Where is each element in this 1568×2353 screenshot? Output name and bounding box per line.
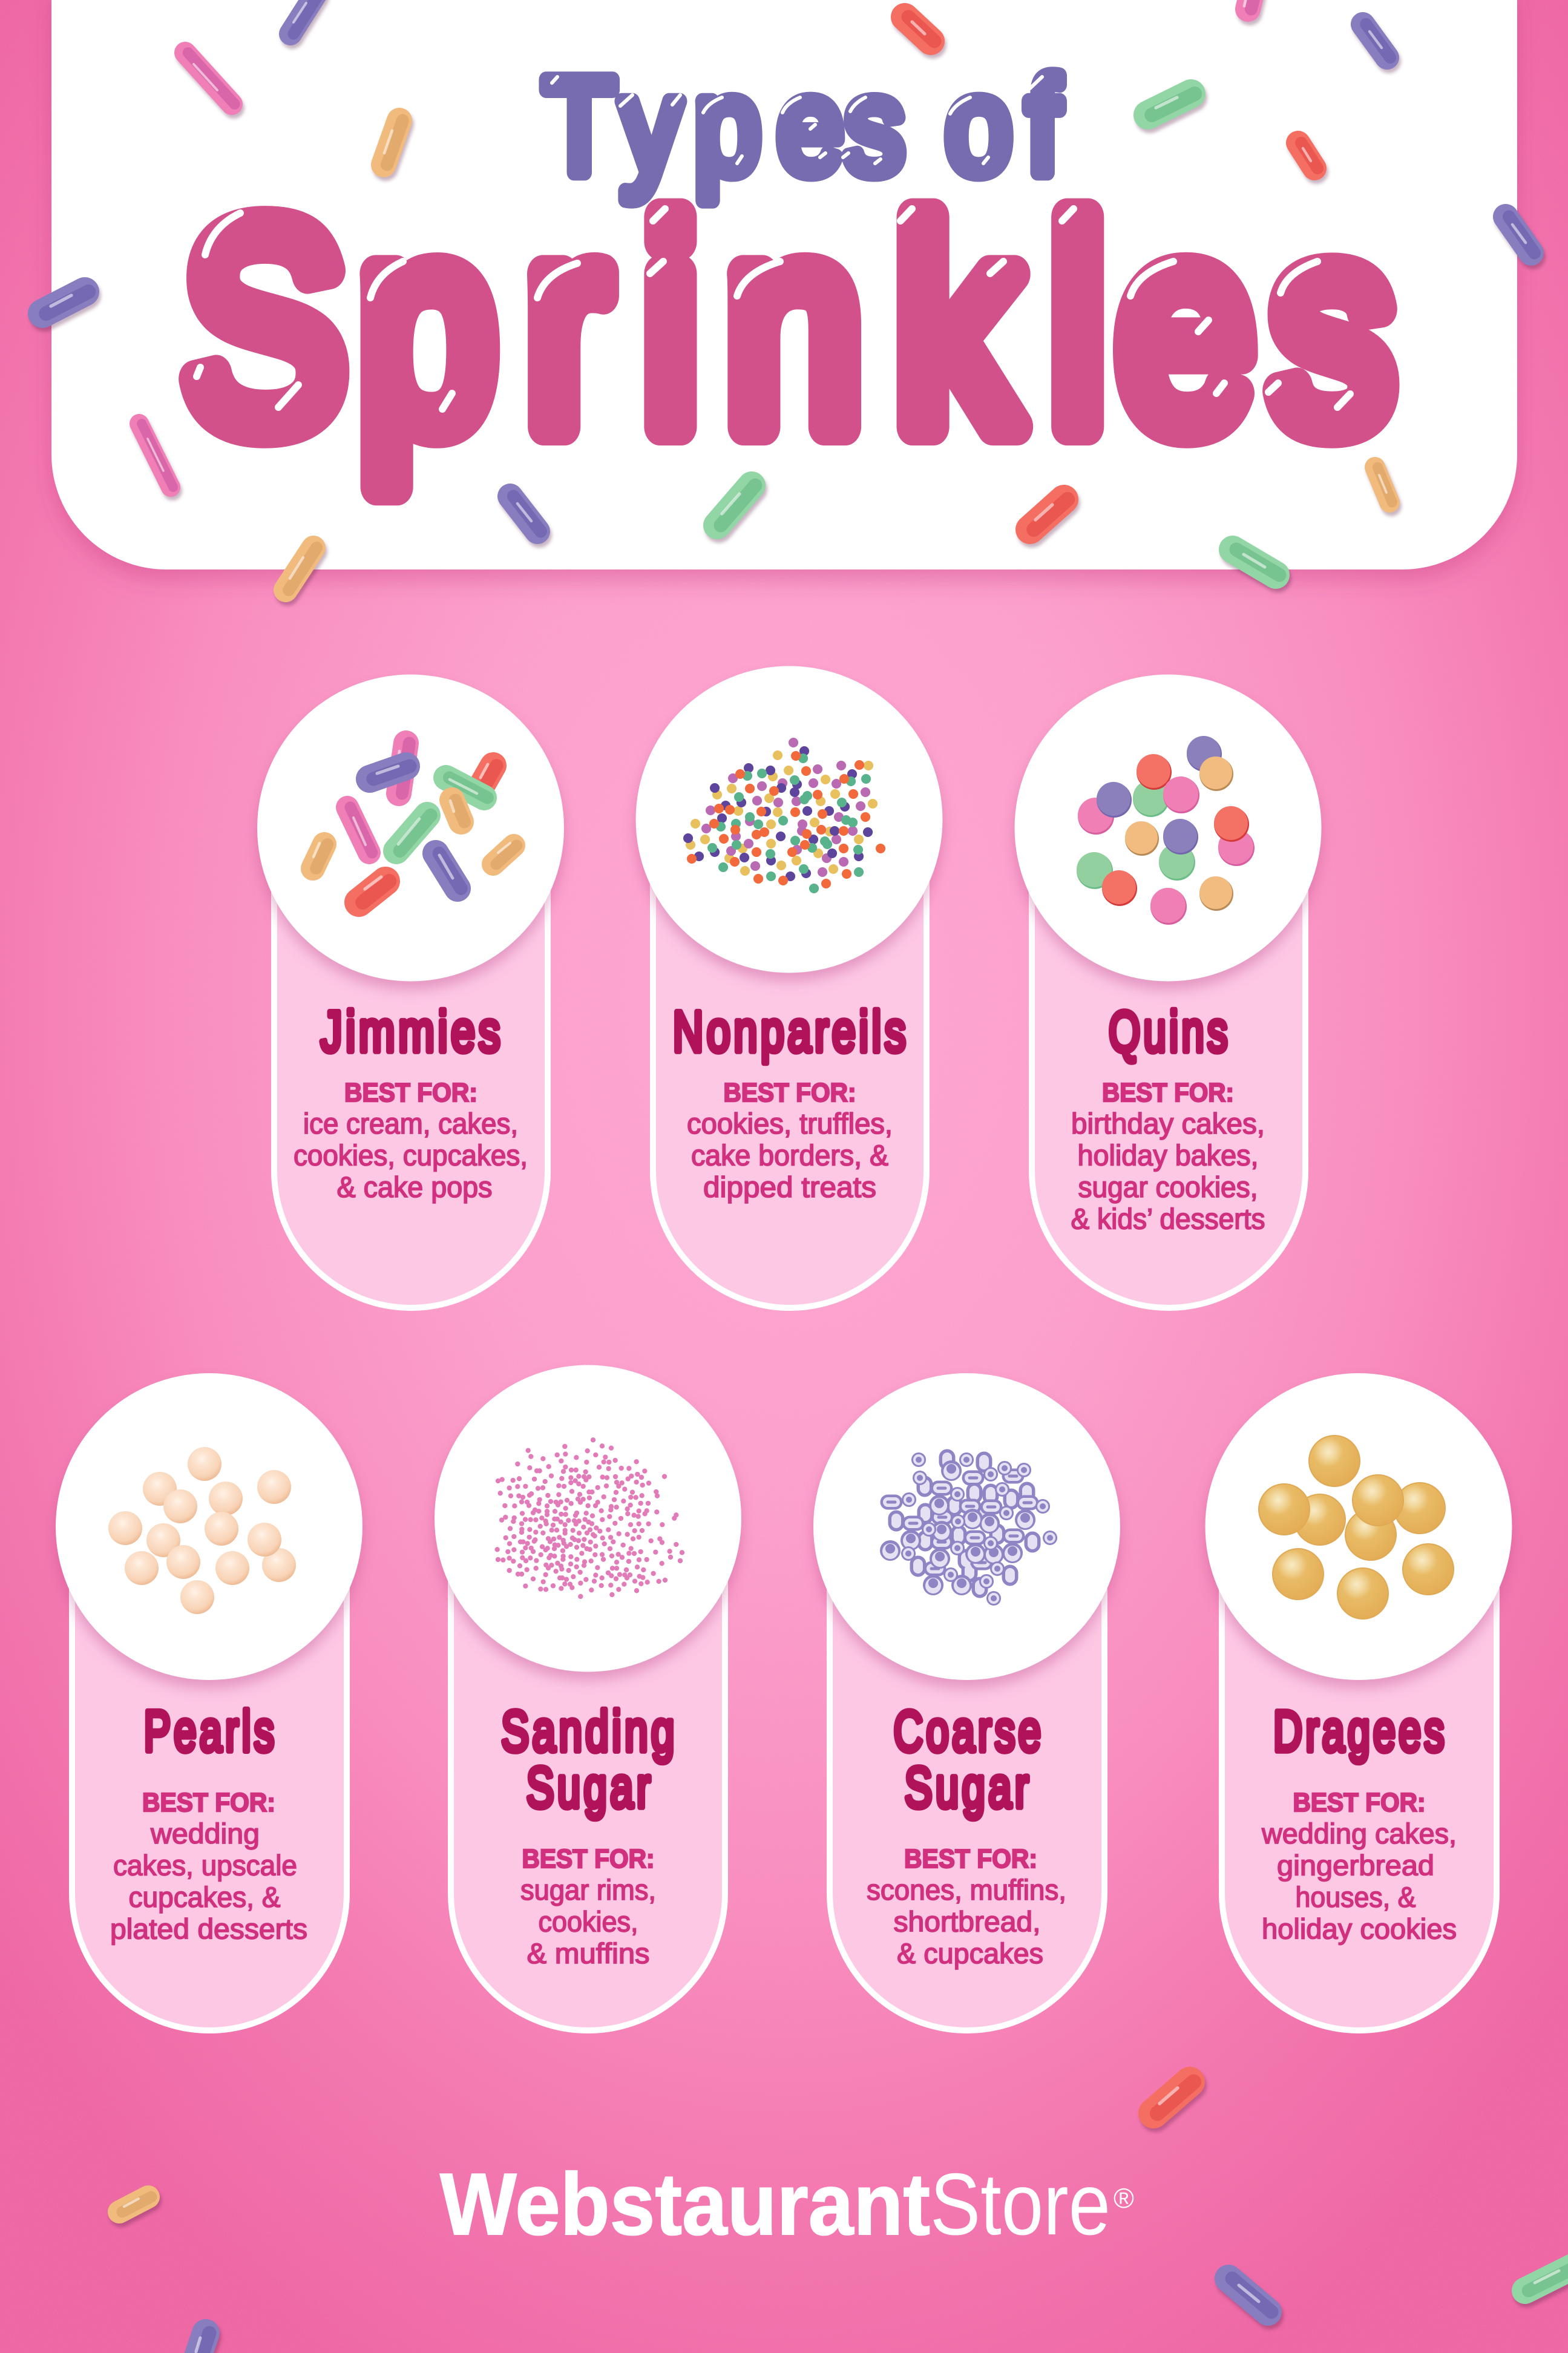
card pill (274, 726, 548, 1308)
sprinkle: orange (286, 548, 317, 590)
card circle (56, 1373, 362, 1680)
card: Nonpareils (635, 666, 943, 1308)
text block: shortbread, (893, 1905, 1041, 1938)
text block: BEST FOR: (904, 1844, 1037, 1874)
heading (894, 1700, 1044, 1820)
card pill (72, 1425, 347, 2030)
icon: pearls (108, 1447, 296, 1614)
heading: Coarse (894, 1700, 1044, 1764)
heading (501, 1699, 678, 1820)
text block: birthday cakes, (1071, 1108, 1265, 1140)
text block (1071, 1078, 1265, 1236)
logo: WebstaurantStore: Webstaurant (440, 2155, 930, 2253)
text block: cookies, truffles, (687, 1108, 893, 1140)
card: Dragees (1206, 1373, 1512, 2030)
title line: Types of: Types of (543, 51, 1060, 202)
text block: dipped treats (703, 1172, 876, 1204)
sprinkle: pink (185, 53, 235, 104)
heading: Quins (1109, 1000, 1231, 1064)
title line: Sprinkles: Sprinkles (183, 165, 1393, 490)
sprinkle: green (717, 485, 755, 525)
sprinkle: orange (119, 2197, 151, 2212)
sprinkle: purple (196, 2333, 209, 2353)
text block: cookies, (539, 1905, 638, 1938)
text block: BEST FOR: (522, 1844, 655, 1874)
sprinkle: orange (1375, 467, 1392, 502)
text block: gingerbread (1277, 1849, 1434, 1881)
heading: Sanding (501, 1699, 678, 1764)
icon: jimmies sprinkles (313, 743, 517, 902)
text block: wedding cakes, (1261, 1817, 1457, 1849)
card circle (257, 674, 564, 982)
text block: sugar cookies, (1078, 1172, 1258, 1204)
text block: & muffins (526, 1937, 650, 1969)
logo: WebstaurantStore: ® (1114, 2182, 1134, 2214)
text block: BEST FOR: (724, 1078, 856, 1108)
card circle (1206, 1373, 1512, 1680)
sprinkle: pink (139, 424, 173, 487)
card pill (830, 1425, 1104, 2030)
icon: sanding sugar (497, 1440, 682, 1597)
card circle (813, 1373, 1120, 1680)
text block: plated desserts (110, 1912, 307, 1945)
text block: ice cream, cakes, (303, 1108, 518, 1140)
sprinkle: red (1030, 499, 1068, 530)
sprinkle: purple (1363, 24, 1390, 57)
heading: Dragees (1273, 1699, 1448, 1764)
text block (110, 1788, 307, 1945)
card pill (653, 718, 927, 1308)
sprinkle: red (1153, 2082, 1193, 2113)
text block: & cupcakes (897, 1937, 1043, 1969)
heading: Sugar (526, 1755, 654, 1820)
text block: holiday bakes, (1077, 1140, 1259, 1172)
sprinkle: orange (384, 120, 402, 165)
sprinkle: purple (42, 292, 88, 313)
card: Coarse Sugar (813, 1373, 1120, 2030)
title (183, 51, 1393, 490)
text block: scones, muffins, (867, 1874, 1066, 1906)
text block: BEST FOR: (142, 1788, 275, 1817)
text block: cake borders, & (691, 1140, 888, 1172)
text block: & kids’ desserts (1071, 1203, 1265, 1236)
text block: & cake pops (336, 1172, 493, 1204)
card pill (451, 1417, 725, 2030)
card pill (1222, 1425, 1497, 2030)
text block: sugar rims, (520, 1874, 656, 1906)
sprinkle: purple (1228, 2279, 1271, 2312)
icon: nonpareils (688, 743, 881, 888)
text block: BEST FOR: (1293, 1788, 1426, 1817)
icon: quins (1077, 736, 1255, 925)
text block (867, 1844, 1066, 1969)
sprinkle: red (1298, 143, 1317, 168)
sprinkle: purple (290, 0, 319, 34)
card circle (1014, 674, 1322, 982)
text block (520, 1844, 656, 1969)
sprinkle: purple (510, 496, 540, 531)
text block (294, 1078, 528, 1204)
sprinkle: green (1525, 2266, 1568, 2291)
card pill (1032, 726, 1305, 1308)
text block: holiday cookies (1262, 1912, 1457, 1945)
logo: WebstaurantStore: Store (930, 2155, 1110, 2253)
sprinkle: red (905, 17, 934, 41)
card circle (435, 1365, 741, 1672)
text block (687, 1078, 893, 1204)
icon: coarse sugar (888, 1457, 1050, 1598)
text block: cookies, cupcakes, (294, 1140, 528, 1172)
text block: houses, & (1295, 1881, 1416, 1913)
sprinkle: green (1148, 94, 1195, 115)
card: Quins (1014, 674, 1322, 1308)
sprinkle: purple (1506, 217, 1534, 253)
heading: Jimmies (321, 999, 504, 1063)
text block: BEST FOR: (344, 1078, 477, 1108)
text block: BEST FOR: (1102, 1078, 1234, 1108)
sprinkle: green (1233, 550, 1279, 575)
icon: dragees (1259, 1436, 1454, 1619)
text block (1261, 1788, 1457, 1945)
heading: Nonpareils (673, 999, 909, 1063)
heading: Pearls (144, 1699, 277, 1764)
heading: Sugar (905, 1755, 1032, 1820)
card circle (635, 666, 943, 973)
card: Jimmies (257, 674, 564, 1308)
card: Sanding Sugar (435, 1365, 741, 2030)
text block: wedding (150, 1817, 260, 1849)
sprinkle: pink (1244, 0, 1255, 9)
card: Pearls (56, 1373, 362, 2030)
header panel (51, 0, 1517, 569)
text block: cakes, upscale (113, 1849, 297, 1881)
text block: cupcakes, & (128, 1881, 281, 1913)
